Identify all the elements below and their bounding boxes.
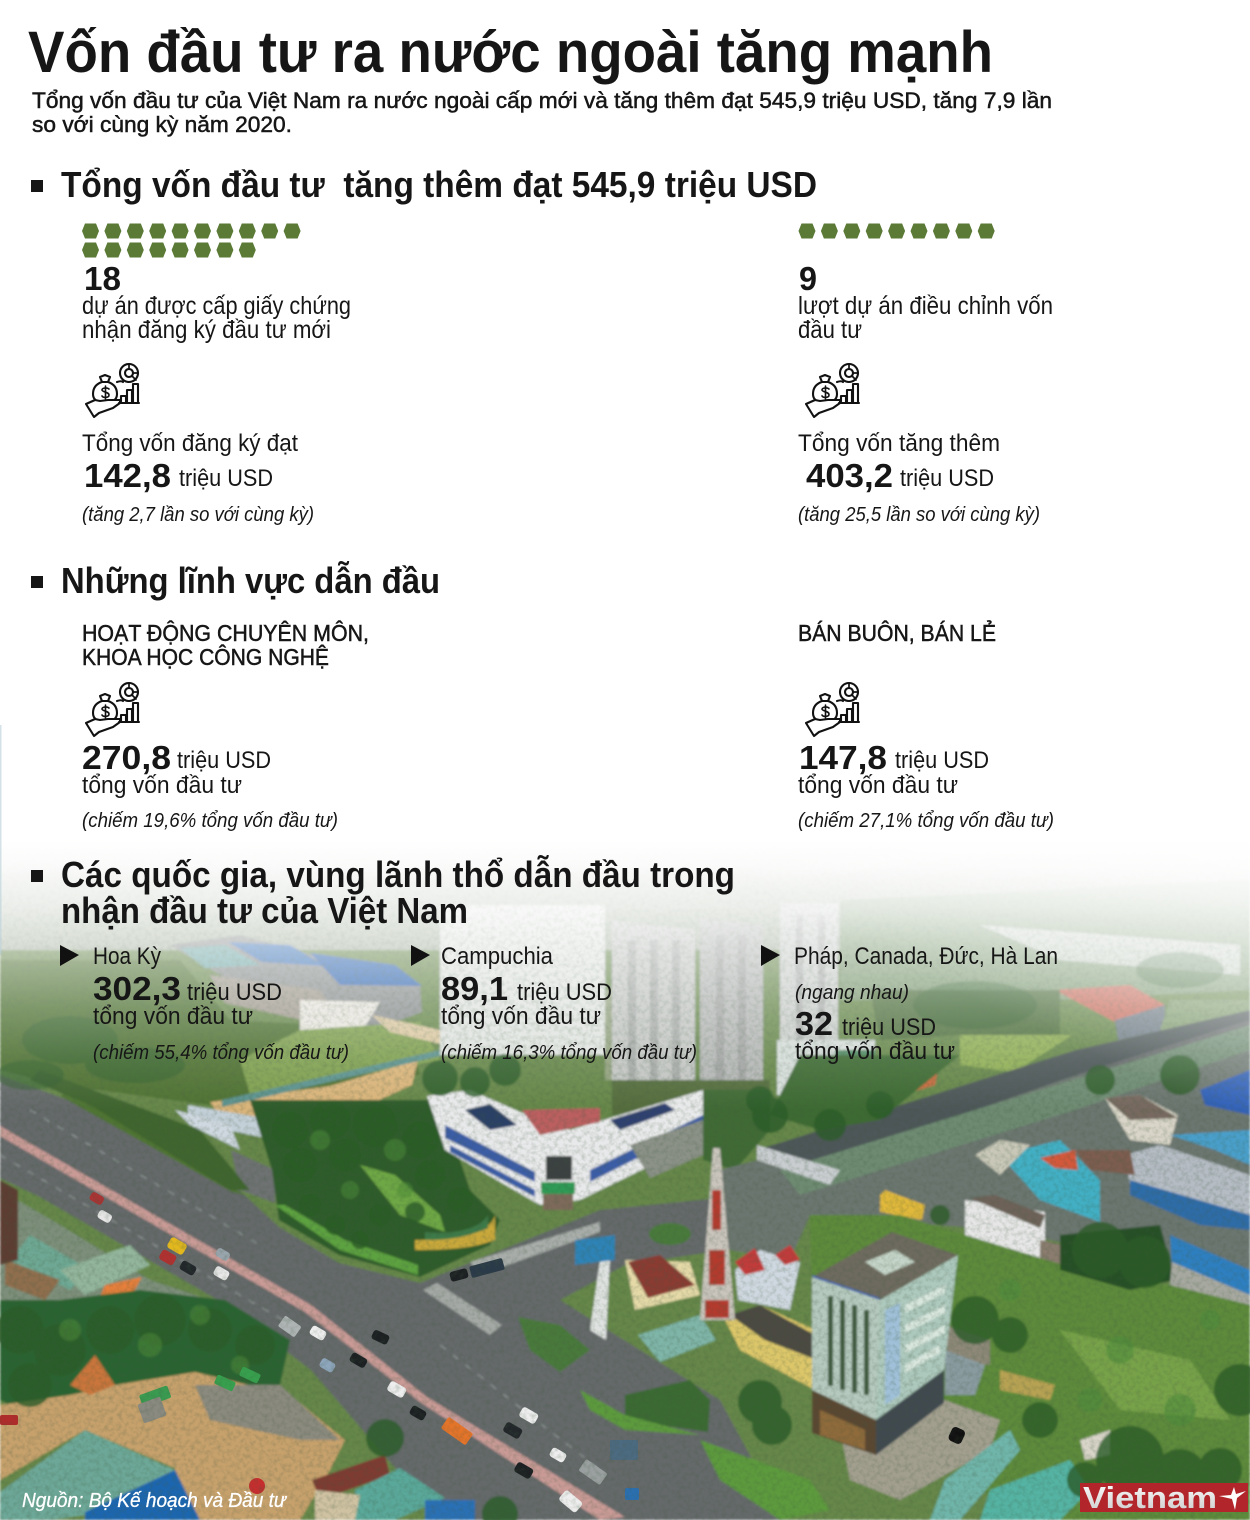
panel: Cambodia: tổng vốn đầu tư: [441, 1003, 601, 1030]
logo: Vietnam+: Vietnam: [1083, 1480, 1217, 1515]
panel: wholesale and retail sector: 147,8: [799, 739, 887, 776]
heading: leading sectors: Những lĩnh vực dẫn đầu: [61, 560, 440, 601]
tower building: [812, 1232, 958, 1455]
panel: professional and science sector: HOẠT ĐỘNG CHUYÊN MÔN,: [82, 619, 369, 646]
panel: professional and science sector: (chiếm 19,6% tổng vốn đầu tư): [82, 810, 338, 832]
panel: adjusted projects: (tăng 25,5 lần so với cùng kỳ): [798, 504, 1040, 526]
heading: leading countries: Các quốc gia, vùng lãnh thổ dẫn đầu trong: [61, 854, 735, 895]
hexagon count: 18 projects: [82, 224, 301, 258]
panel: United States: [60, 943, 349, 1064]
panel: adjusted projects: đầu tư: [798, 316, 862, 344]
heading: leading countries: nhận đầu tư của Việt Nam: [61, 890, 468, 931]
panel: wholesale and retail sector: BÁN BUÔN, BÁN LẺ: [798, 618, 996, 646]
foliage: [0, 1054, 1250, 1520]
icon: money bag and chart: [806, 683, 859, 736]
heading: total capital: Tổng vốn đầu tư tăng thêm đạt 545,9 triệu USD: [61, 164, 817, 205]
panel: professional and science sector: triệu USD: [177, 747, 271, 774]
background aerial photo: [0, 725, 1250, 1520]
panel: France, Canada, Germany, Netherlands: triệu USD: [842, 1014, 936, 1041]
white fade over photo: [0, 838, 1250, 1112]
panel: wholesale and retail sector: tổng vốn đầu tư: [798, 772, 958, 799]
panel: United States: Hoa Kỳ: [93, 943, 161, 970]
right-side haze: [0, 840, 1250, 1130]
panel: professional and science sector: tổng vốn đầu tư: [82, 772, 242, 799]
title: Vốn đầu tư ra nước ngoài tăng mạnh: [28, 20, 993, 85]
panel: professional and science sector: 270,8: [82, 739, 171, 776]
panel: professional and science sector: KHOA HỌC CÔNG NGHỆ: [82, 643, 329, 670]
panel: wholesale and retail sector: [798, 618, 1054, 832]
panel: France, Canada, Germany, Netherlands: [761, 943, 1058, 1065]
panel: adjusted projects: triệu USD: [900, 465, 994, 492]
icon: money bag and chart: [86, 683, 139, 736]
panel: new projects: Tổng vốn đăng ký đạt: [82, 430, 298, 457]
panel: adjusted projects: lượt dự án điều chỉnh vốn: [798, 292, 1053, 320]
panel: new projects: triệu USD: [179, 465, 273, 492]
panel: United States: (chiếm 55,4% tổng vốn đầu tư): [93, 1042, 349, 1064]
panel: Cambodia: Campuchia: [441, 943, 554, 970]
panel: Cambodia: [411, 943, 697, 1064]
panel: adjusted projects: 9: [799, 260, 817, 297]
icon: money bag and chart: [86, 364, 139, 417]
panel: adjusted projects: Tổng vốn tăng thêm: [798, 430, 1000, 457]
heading: leading countries: [31, 854, 735, 931]
panel: United States: triệu USD: [187, 979, 282, 1006]
panel: adjusted projects: 403,2: [806, 457, 893, 494]
panel: new projects: (tăng 2,7 lần so với cùng kỳ): [82, 504, 314, 526]
panel: Cambodia: 89,1: [441, 970, 508, 1007]
source note: Nguồn: Bộ Kế hoạch và Đầu tư: [22, 1490, 287, 1512]
hexagon count: 9 projects: [798, 224, 995, 238]
intro text: Tổng vốn đầu tư của Việt Nam ra nước ngoài cấp mới và tăng thêm đạt 545,9 triệu USD, tăng 7,9 lần: [32, 88, 1052, 113]
panel: new projects: dự án được cấp giấy chứng: [82, 292, 351, 320]
intro text: [32, 88, 1052, 137]
photo texture: [0, 840, 1250, 1520]
panel: professional and science sector: [82, 619, 369, 832]
panel: France, Canada, Germany, Netherlands: (ngang nhau): [795, 982, 909, 1004]
panel: new projects: nhận đăng ký đầu tư mới: [82, 316, 331, 344]
panel: Cambodia: triệu USD: [517, 979, 612, 1006]
panel: United States: tổng vốn đầu tư: [93, 1003, 253, 1030]
panel: wholesale and retail sector: triệu USD: [895, 747, 989, 774]
panel: adjusted projects: [798, 224, 1053, 526]
panel: France, Canada, Germany, Netherlands: Pháp, Canada, Đức, Hà Lan: [794, 943, 1058, 970]
panel: France, Canada, Germany, Netherlands: tổng vốn đầu tư: [795, 1038, 955, 1065]
panel: new projects: [82, 224, 351, 526]
panel: France, Canada, Germany, Netherlands: 32: [795, 1005, 833, 1042]
intro text: so với cùng kỳ năm 2020.: [32, 112, 292, 137]
panel: Cambodia: (chiếm 16,3% tổng vốn đầu tư): [441, 1042, 697, 1064]
panel: wholesale and retail sector: (chiếm 27,1% tổng vốn đầu tư): [798, 810, 1054, 832]
panel: new projects: 142,8: [84, 457, 171, 494]
road vehicles: [0, 1191, 966, 1513]
icon: money bag and chart: [806, 364, 859, 417]
panel: United States: 302,3: [93, 970, 181, 1007]
panel: new projects: 18: [84, 260, 121, 297]
